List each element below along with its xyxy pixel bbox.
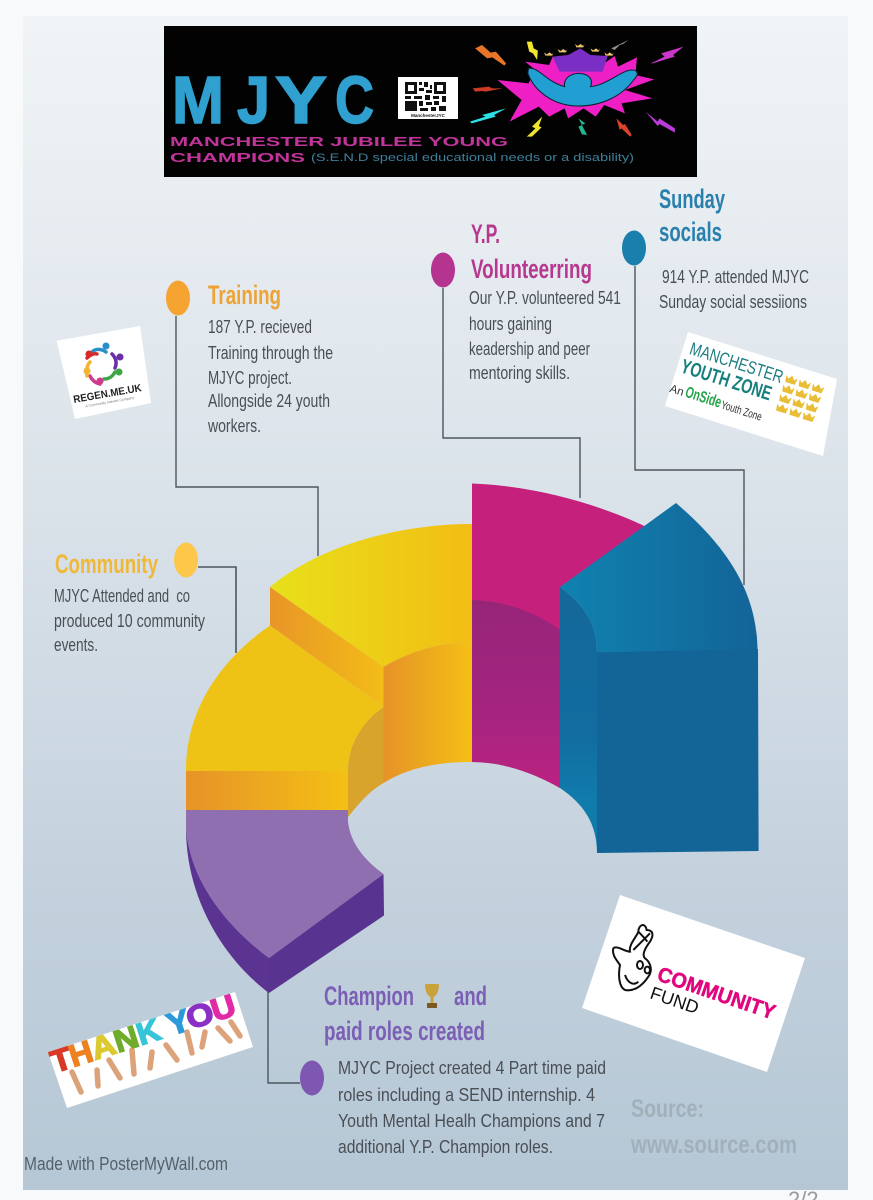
title line two: CHAMPIONS: [170, 151, 305, 165]
icon: crowns: [775, 374, 825, 422]
icon: champion figure: [528, 68, 637, 106]
text: Fund: FUND: [648, 983, 701, 1018]
logo card: Community Fund: [582, 895, 805, 1072]
heading: Y.P. Volunteerring: [471, 219, 592, 284]
MJYC wordmark: C: [335, 63, 374, 138]
text: Community: [54, 586, 205, 655]
text: Sunday socials: 914 Y.P. attended MJYC: [662, 267, 809, 287]
text: Sunday socials: Sunday social sessiions: [659, 292, 807, 312]
logo card: Thank You: [46, 988, 253, 1108]
dot: Y.P. Volunteerring: [431, 252, 455, 288]
text: Y.P. Volunteerring: hours gaining: [469, 314, 552, 334]
icon: champion artwork: [470, 40, 683, 137]
icon: trophy: [425, 984, 439, 1008]
text: Regen.me.uk: REGEN.ME.UK: [72, 382, 143, 406]
MJYC wordmark: [172, 63, 374, 138]
text: An OnSide Youth Zone: An: [668, 383, 685, 399]
heading: Community: Community: [55, 549, 158, 579]
logo card: Regen.me.uk: [57, 326, 151, 419]
text: Champion: roles including a SEND internship. 4: [338, 1085, 595, 1105]
3D segmented arc chart: [186, 484, 759, 993]
icon: lightning bolts: [470, 40, 683, 137]
connector: Y.P. Volunteerring: [443, 288, 580, 498]
heading: Sunday socials: [659, 184, 725, 247]
logo card: Manchester Youth Zone: [665, 332, 837, 456]
text: Training: [207, 317, 333, 436]
dot: Sunday socials: [622, 230, 646, 266]
segment: Champion (purple): [186, 810, 384, 993]
text: Community: produced 10 community: [54, 611, 205, 631]
icon: hands holding letters: [72, 1022, 240, 1092]
text: Y.P. Volunteerring: [469, 288, 621, 383]
heading: Y.P. Volunteerring: Volunteerring: [471, 254, 592, 284]
text: Thank You letters: O: [182, 995, 218, 1036]
heading: Champion and paid roles created: and: [454, 981, 487, 1011]
text: Thank You letters: U: [206, 988, 240, 1028]
text: Youth Zone: YOUTH ZONE: [678, 356, 774, 405]
text: Training: Allongside 24 youth: [208, 391, 330, 411]
connector: Champion: [268, 990, 300, 1083]
text: Training: workers.: [207, 416, 261, 436]
connector: Training: [176, 316, 318, 556]
text: Thank You letters: [46, 988, 240, 1080]
text: Champion: [338, 1058, 606, 1157]
text: Manchester: MANCHESTER: [687, 339, 786, 387]
logo card: Manchester Youth Zone: Youth Zone: [720, 399, 763, 424]
text: Regen tagline: A Community Interest Company: [85, 396, 135, 408]
heading: Sunday socials: Sunday: [659, 184, 725, 214]
dot: Community: [174, 542, 198, 578]
segment: Sunday socials (blue): [560, 503, 759, 853]
text: Thank You letters: N: [109, 1019, 143, 1059]
icon: hand face: [637, 961, 643, 969]
icon: regen people ring: [85, 344, 122, 384]
text: Training: MJYC project.: [208, 368, 292, 388]
text: Thank You letters: H: [65, 1034, 97, 1074]
text: Champion: additional Y.P. Champion roles.: [338, 1137, 553, 1157]
text: Champion: MJYC Project created 4 Part time paid: [338, 1058, 606, 1078]
heading: Sunday socials: socials: [659, 217, 722, 247]
text: Training: 187 Y.P. recieved: [208, 317, 312, 337]
icon: crown: [553, 48, 608, 72]
icon: starburst: [498, 56, 654, 122]
text: Thank You letters: A: [86, 1026, 120, 1067]
heading: Champion and paid roles created: paid roles created: [324, 1016, 485, 1046]
heading: Training: Training: [208, 280, 281, 310]
MJYC wordmark: Y: [275, 63, 327, 138]
QR code: ManchesterJYC: [411, 113, 446, 118]
text: Community: MJYC Attended and co: [54, 586, 190, 606]
icon: crossed fingers hand: [613, 925, 652, 990]
text: Champion: Youth Mental Healh Champions and 7: [338, 1111, 605, 1131]
text: Thank You letters: Y: [163, 1002, 195, 1042]
connector: Sunday socials: [635, 266, 744, 585]
source credit: www.source.com: [630, 1131, 797, 1159]
text: Training: Training through the: [208, 343, 333, 363]
text: Sunday socials: [659, 267, 809, 312]
logo card: Manchester Youth Zone: OnSide: [683, 384, 724, 412]
source credit: [630, 1095, 797, 1159]
text: Y.P. Volunteerring: Our Y.P. volunteered 541: [469, 288, 621, 308]
segment: Y.P. Volunteerring (magenta): [472, 484, 644, 788]
heading: Y.P. Volunteerring: Y.P.: [471, 219, 500, 249]
SEND subtitle: (S.E.N.D special educational needs or a disability): [311, 152, 634, 164]
text: Thank You letters: K: [132, 1012, 165, 1052]
text: Y.P. Volunteerring: keadership and peer: [469, 339, 590, 359]
MJYC wordmark: J: [237, 63, 270, 138]
icon: small crowns: [544, 44, 614, 56]
text: Community: events.: [54, 635, 98, 655]
header banner: MJYC logo: [164, 26, 697, 177]
MJYC wordmark: M: [172, 63, 224, 138]
segment: Community (lower yellow): [186, 626, 384, 817]
heading: Champion and paid roles created: Champion: [324, 981, 414, 1011]
dot: Training: [166, 280, 190, 316]
heading: Champion and paid roles created: [324, 981, 487, 1046]
connector: Community: [198, 567, 236, 653]
text: Community: COMMUNITY: [654, 963, 778, 1024]
text: Y.P. Volunteerring: mentoring skills.: [469, 363, 570, 383]
title line one: MANCHESTER JUBILEE YOUNG: [170, 135, 508, 149]
source credit: Source:: [631, 1095, 704, 1123]
dot: Champion: [300, 1060, 324, 1096]
QR code: [398, 77, 458, 119]
text: Thank You letters: T: [46, 1040, 76, 1080]
made with credit: Made with PosterMyWall.com: [24, 1154, 228, 1174]
segment: Training (upper yellow): [270, 524, 472, 783]
